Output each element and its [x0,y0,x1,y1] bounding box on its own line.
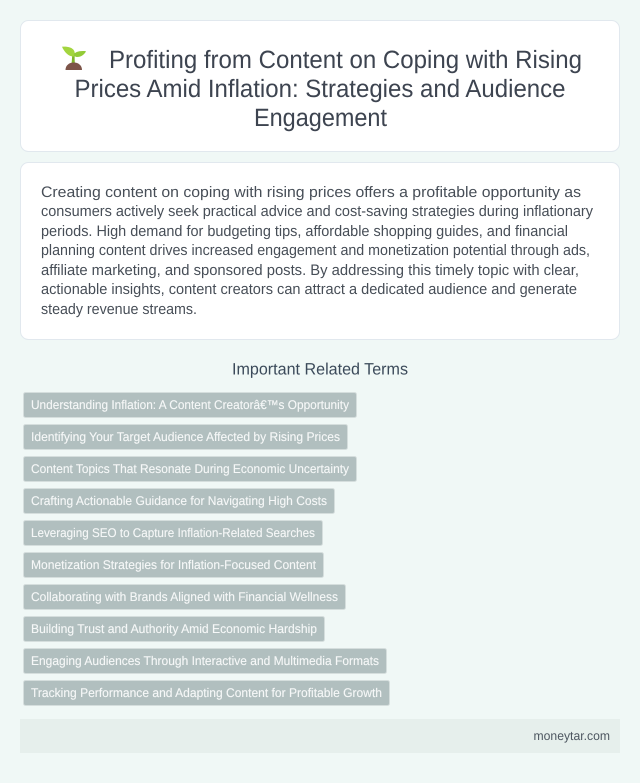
tag 1 [24,392,356,418]
title: Profiting from Content on Coping with Rising [109,46,582,74]
tag 3 [24,456,356,482]
summary paragraph: steady revenue streams. [41,301,197,318]
panel: title card [20,20,620,152]
footer source text: moneytar.com [534,729,610,743]
tag 4 [24,488,334,514]
tag 10 [24,680,390,706]
icon: seedling [62,47,86,70]
tag 2 [24,424,348,450]
footer [20,719,620,753]
tag 8: Building Trust and Authority Amid Economic Hardship [31,622,317,636]
summary paragraph: planning content drives increased engagement and monetization potential through ads, [41,242,590,259]
heading: important related terms: Important Related Terms [232,360,408,378]
tag 5: Leveraging SEO to Capture Inflation-Related Searches [31,526,315,540]
tag 9: Engaging Audiences Through Interactive and Multimedia Formats [31,654,379,668]
title: Engagement [254,104,387,132]
summary paragraph: Creating content on coping with rising prices offers a profitable opportunity as [41,184,581,201]
tag 6 [24,552,324,578]
summary paragraph: actionable insights, content creators can attract a dedicated audience and generate [41,281,577,298]
tag 4: Crafting Actionable Guidance for Navigating High Costs [31,494,327,508]
tag 3: Content Topics That Resonate During Economic Uncertainty [31,462,350,476]
summary paragraph: affiliate marketing, and sponsored posts. By addressing this timely topic with clear, [41,262,579,279]
summary paragraph [41,184,593,318]
tag 8 [24,616,324,642]
summary paragraph: periods. High demand for budgeting tips, affordable shopping guides, and financial [41,223,568,240]
tag 1: Understanding Inflation: A Content Creatorâ€™s Opportunity [31,398,350,412]
tag 7: Collaborating with Brands Aligned with Financial Wellness [31,590,338,604]
tag 9 [24,648,386,674]
tag 5 [24,520,322,546]
title: Prices Amid Inflation: Strategies and Audience [74,75,566,103]
summary paragraph: consumers actively seek practical advice and cost-saving strategies during inflationary [41,203,593,220]
tag list [24,392,390,706]
tag 10: Tracking Performance and Adapting Content for Profitable Growth [31,686,382,700]
panel: summary card [20,162,620,340]
tag 7 [24,584,346,610]
tag 6: Monetization Strategies for Inflation-Focused Content [31,558,316,572]
title [74,46,582,132]
tag 2: Identifying Your Target Audience Affected by Rising Prices [31,430,340,444]
